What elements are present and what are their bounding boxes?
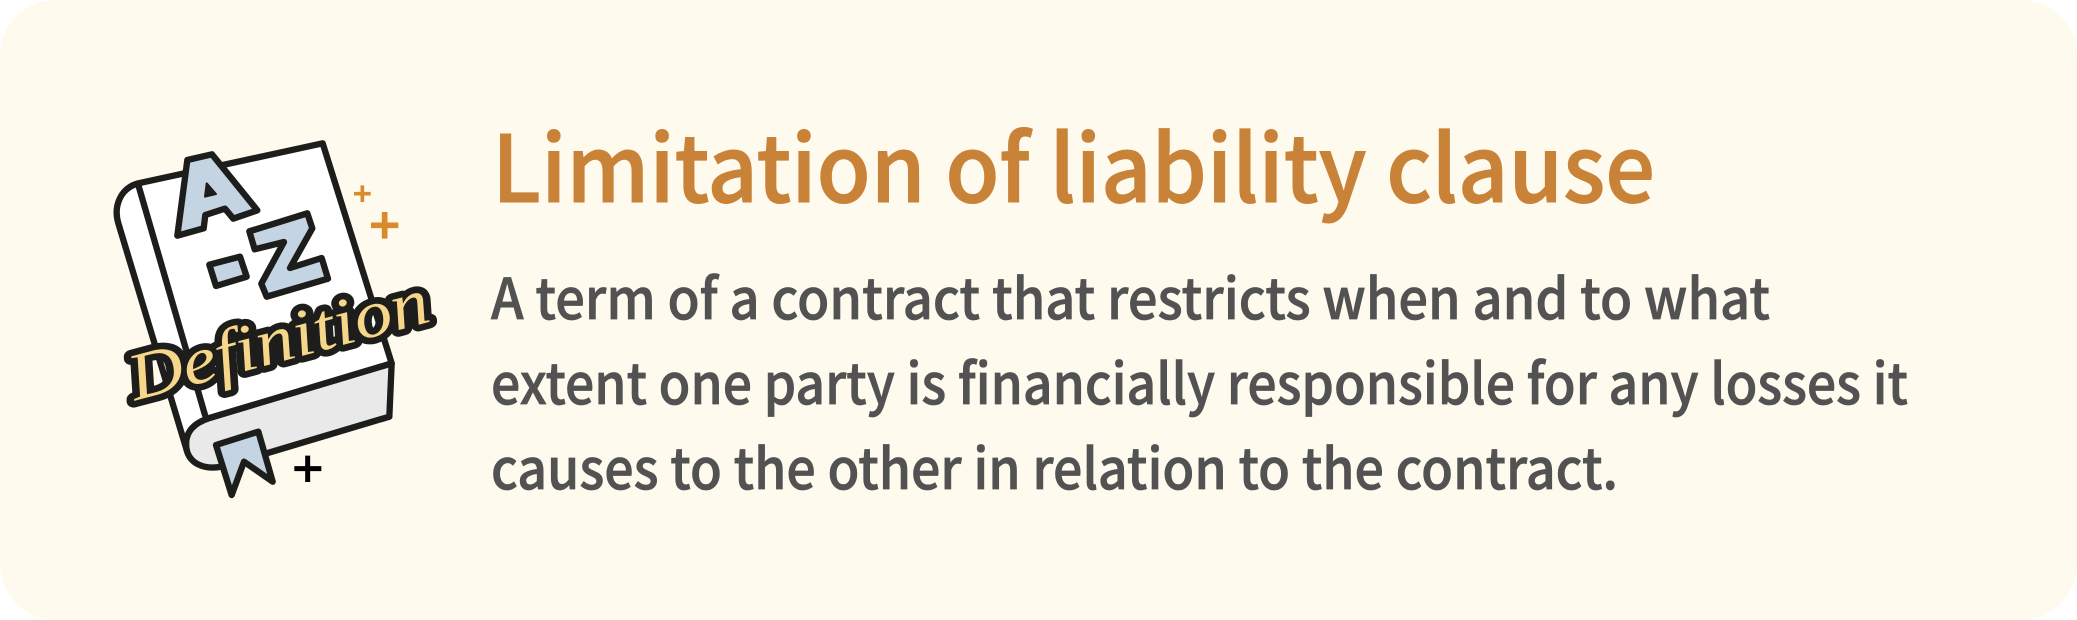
icon: definition book <box>117 143 437 495</box>
title: Limitation of liability clause <box>492 96 1655 229</box>
definition text <box>491 255 1908 506</box>
definition line 1: A term of a contract that restricts when and to what <box>491 255 1770 336</box>
book cover <box>117 143 392 450</box>
large orange plus <box>371 212 398 239</box>
definition line 2: extent one party is financially responsible for any losses it <box>491 340 1908 421</box>
dash between letters <box>209 257 247 286</box>
book page block <box>186 363 392 468</box>
definition line 3: causes to the other in relation to the contract. <box>491 425 1618 506</box>
letter Z <box>249 213 328 297</box>
letter A counter <box>205 183 216 197</box>
Definition lettering: Definition <box>119 265 437 415</box>
bookmark ribbon <box>216 432 273 495</box>
book spine line <box>138 185 205 415</box>
black plus <box>294 456 321 482</box>
small orange plus <box>354 185 371 202</box>
letter A <box>177 154 257 236</box>
